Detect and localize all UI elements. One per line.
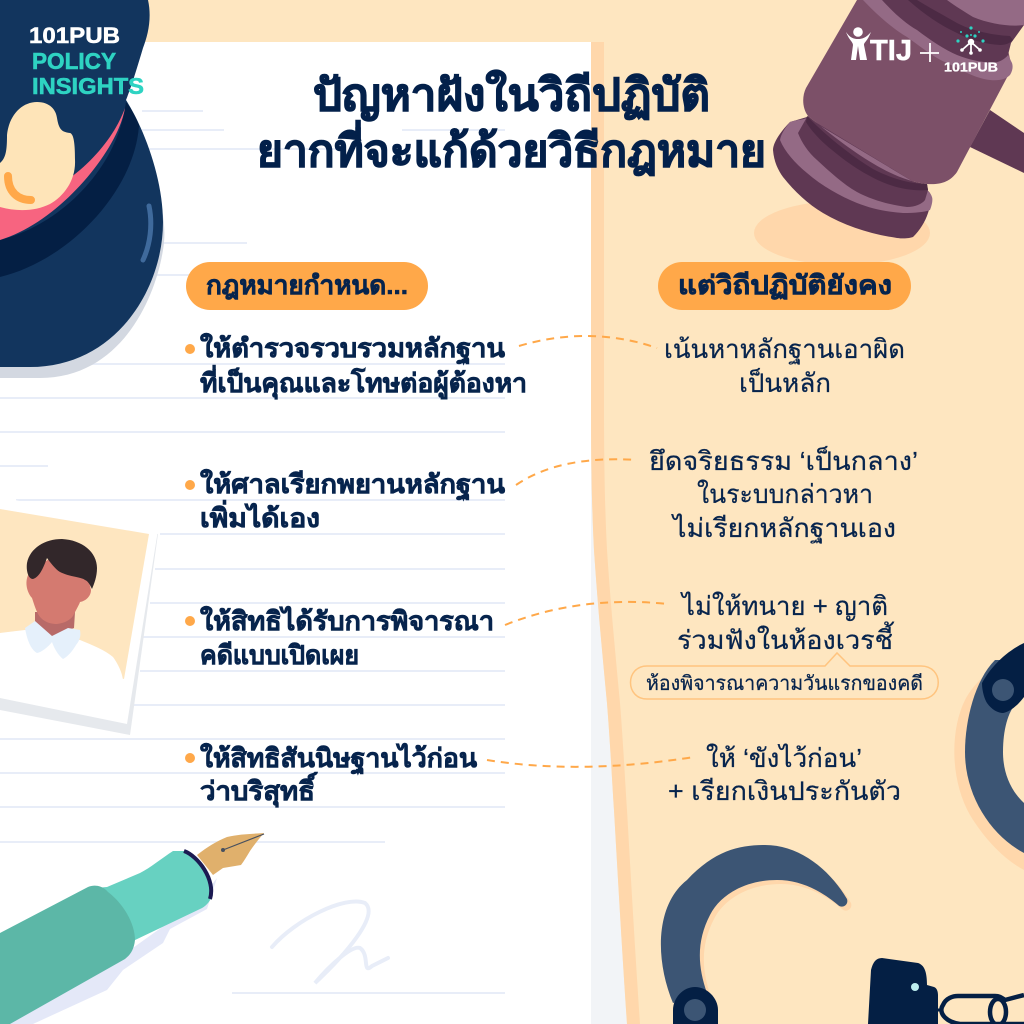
right item 1: เป็นหลัก <box>739 367 831 398</box>
left item 3 <box>185 605 494 670</box>
right item 4: ให้ ‘ขังไว้ก่อน’ <box>706 743 862 773</box>
left item 2: เพิ่มได้เอง <box>200 499 320 533</box>
right item 2: ไม่เรียกหลักฐานเอง <box>671 513 896 544</box>
title <box>257 69 766 176</box>
illustration: ink bottle top-left <box>0 0 164 378</box>
panel: paper sheet <box>0 42 640 1024</box>
right header pill: แต่วิถีปฏิบัติยังคง <box>678 270 892 300</box>
right item 2 <box>649 445 918 544</box>
illustration: fountain pen <box>0 833 264 1024</box>
illustration: signature <box>272 901 388 983</box>
left item 3: คดีแบบเปิดเผย <box>200 640 359 670</box>
logo: 101PUB Policy Insights <box>29 23 144 99</box>
dashed connectors <box>487 336 694 767</box>
illustration: gavel <box>754 0 1024 265</box>
right item 1: เน้นหาหลักฐานเอาผิด <box>664 334 905 365</box>
illustration: photo of suspect <box>0 497 158 735</box>
left item 2: ให้ศาลเรียกพยานหลักฐาน <box>200 469 505 502</box>
left item 3: ให้สิทธิได้รับการพิจารณา <box>200 605 494 636</box>
title: ยากที่จะแก้ด้วยวิธีกฎหมาย <box>257 120 766 176</box>
right item 3: ร่วมฟังในห้องเวรชี้ <box>677 621 894 655</box>
right item 2: ในระบบกล่าวหา <box>697 479 873 509</box>
left item 2 <box>185 469 505 533</box>
callout: ห้องพิจารณาความวันแรกของคดี <box>646 673 923 695</box>
illustration: handcuffs <box>661 643 1024 1024</box>
left header pill: กฎหมายกำหนด... <box>206 270 408 300</box>
right item 3 <box>677 591 894 655</box>
right item 2: ยึดจริยธรรม ‘เป็นกลาง’ <box>649 445 918 476</box>
left item 4: ให้สิทธิสันนิษฐานไว้ก่อน <box>200 742 477 776</box>
left item 1: ให้ตำรวจรวบรวมหลักฐาน <box>200 333 505 366</box>
right item 4 <box>668 743 901 806</box>
left item 4: ว่าบริสุทธิ์ <box>200 771 318 808</box>
right item 4: + เรียกเงินประกันตัว <box>668 776 901 806</box>
logo: 101PUB Policy Insights: 101PUB <box>29 23 120 48</box>
left header pill <box>186 262 428 310</box>
right header pill <box>658 262 911 310</box>
logo: 101PUB Policy Insights: POLICY <box>32 48 116 74</box>
right item 3: ไม่ให้ทนาย + ญาติ <box>680 591 888 621</box>
logo: 101PUB Policy Insights: INSIGHTS <box>32 73 144 99</box>
logo: TIJ + 101PUB <box>846 26 998 74</box>
left item 1 <box>185 333 527 400</box>
logo: TIJ + 101PUB: 101PUB <box>944 60 998 74</box>
logo: TIJ + 101PUB: TIJ <box>870 35 912 67</box>
left item 4 <box>185 742 477 808</box>
left item 1: ที่เป็นคุณและโทษต่อผู้ต้องหา <box>200 364 527 400</box>
title: ปัญหาฝังในวิถีปฏิบัติ <box>313 69 710 121</box>
callout <box>630 653 938 699</box>
right item 1 <box>664 334 905 398</box>
